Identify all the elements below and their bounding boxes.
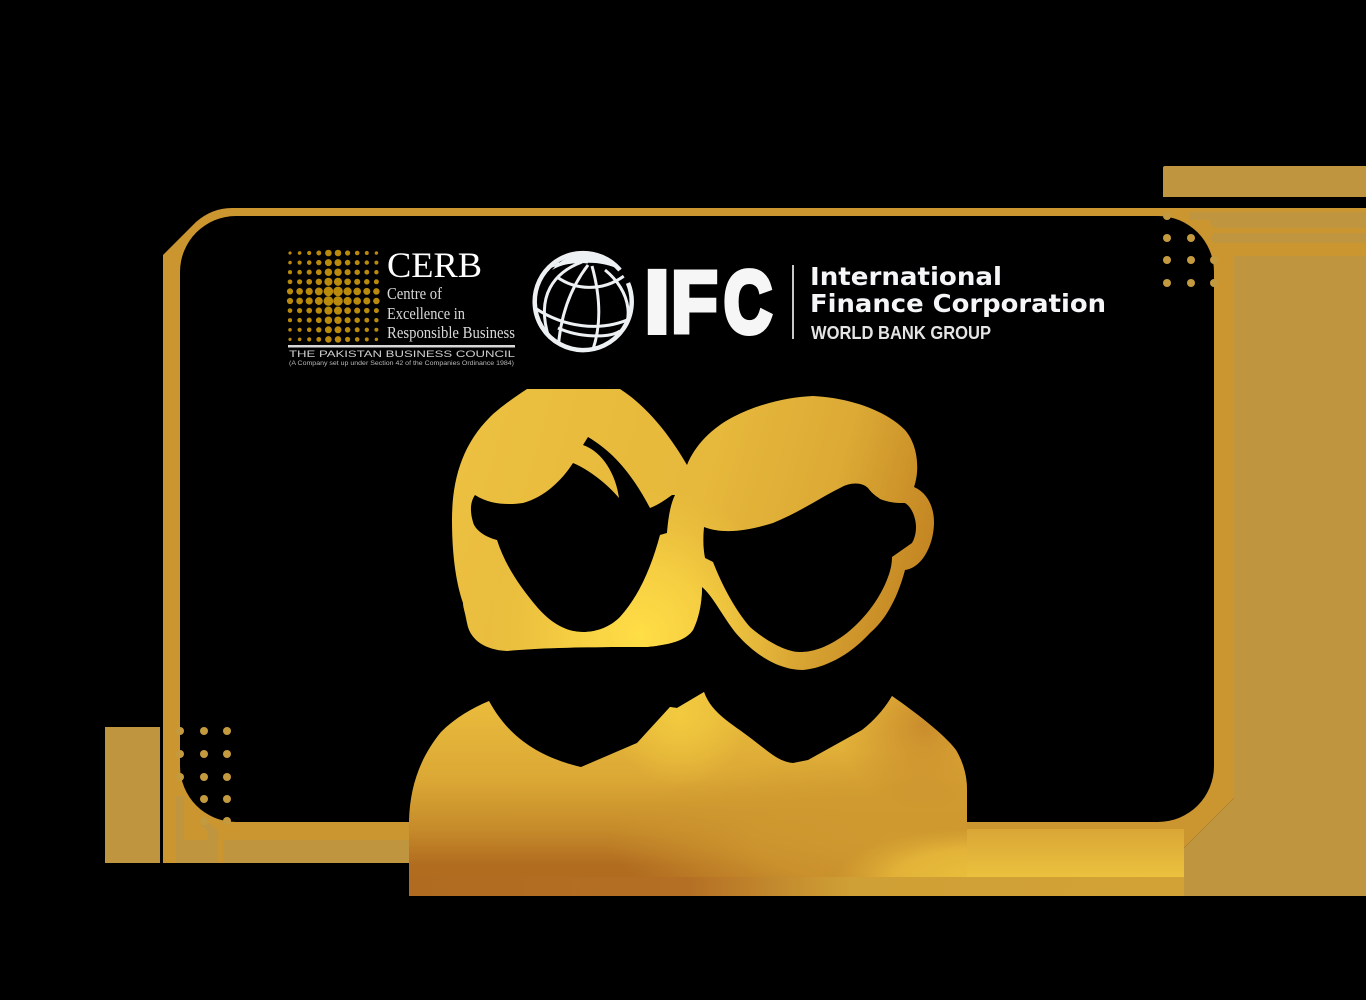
accent block: bottom strip xyxy=(223,840,409,863)
dot grid: upper right xyxy=(1163,212,1218,287)
gold frame xyxy=(163,208,1366,896)
CERB wordmark: CERB xyxy=(387,245,482,285)
icon: IFC globe xyxy=(535,253,634,352)
icon: two people, heads xyxy=(452,389,934,670)
accent block: lower left strip xyxy=(176,796,218,863)
IFC logo wordmark xyxy=(645,254,772,351)
CERB parent organisation: THE PAKISTAN BUSINESS COUNCIL xyxy=(289,349,515,359)
infographic canvas xyxy=(105,166,1366,896)
globe outline xyxy=(535,253,632,350)
icon: two people, bodies xyxy=(400,685,1190,900)
IFC full name xyxy=(810,262,1106,343)
IFC full name: International xyxy=(810,262,1002,291)
CERB legal note: (A Company set up under Section 42 of the Companies Ordinance 1984) xyxy=(289,360,514,367)
CERB rule xyxy=(288,345,515,348)
globe grid lines xyxy=(537,262,630,348)
CERB full name: Responsible Business xyxy=(387,323,515,342)
icon: CERB dot matrix xyxy=(287,250,379,342)
accent block: right side panel xyxy=(1184,256,1366,896)
IFC logo wordmark: C xyxy=(724,254,772,351)
IFC full name: Finance Corporation xyxy=(810,289,1106,318)
CERB full name: Centre of xyxy=(387,284,442,303)
CERB full name: Excellence in xyxy=(387,304,465,323)
CERB logo xyxy=(287,245,515,367)
IFC divider xyxy=(792,265,794,339)
black central panel xyxy=(180,216,1214,822)
dot grid: lower left xyxy=(176,727,231,825)
globe polar cap xyxy=(552,254,621,270)
accent block: upper right stripes xyxy=(1189,212,1366,243)
IFC logo wordmark: I xyxy=(645,254,669,351)
accent block: top right bar xyxy=(1163,166,1366,197)
CERB full name xyxy=(387,284,515,342)
IFC full name: WORLD BANK GROUP xyxy=(811,323,991,343)
accent block: lower left panel xyxy=(105,727,160,863)
IFC logo wordmark: F xyxy=(671,254,718,351)
